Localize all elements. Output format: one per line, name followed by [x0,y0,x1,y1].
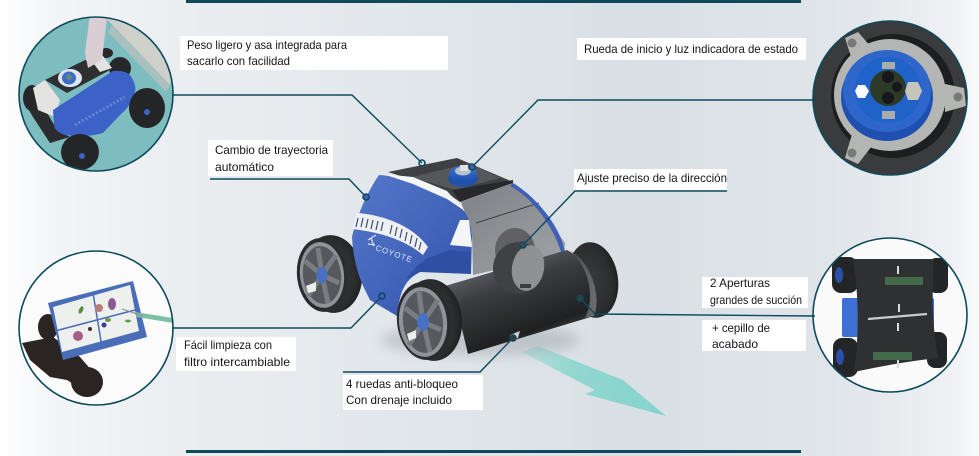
rear right wheel [563,239,623,321]
callout: filter: Fácil limpieza con [184,338,272,352]
leader line: handle [172,95,425,166]
small skid [510,331,520,340]
rear left wheel [293,232,366,316]
callout: steering [574,169,727,190]
leader line: dial [469,100,815,170]
callout: suction: grandes de succión [710,293,802,307]
brush bar [868,314,927,319]
circle: underside detail [813,238,967,392]
white top stripe [383,174,465,211]
callout: wheels [343,375,483,410]
top deck [388,158,513,202]
callout: brush: + cepillo de [712,321,770,335]
callout: trajectory: automático [215,160,274,174]
leader line: trajectory [210,179,369,200]
callout: start dial [577,38,806,60]
callout: wheels: 4 ruedas anti-bloqueo [346,377,458,391]
callout: trajectory [208,140,333,176]
lower shell shade [405,250,471,280]
callout: filter [176,337,296,371]
callout: trajectory: Cambio de trayectoria [215,143,328,157]
wand [135,312,173,323]
blue shell [352,175,472,316]
ring [19,17,173,171]
callout: light weight: Peso ligero y asa integrada para [187,38,347,52]
leader line: steering [520,191,727,248]
blue sides [842,298,858,337]
leader line: suction [577,295,815,316]
robot cleaner [293,158,623,364]
leader line: wheels [343,335,516,372]
circle: filter detail [19,251,173,405]
roller tube [445,250,596,354]
grey housing [461,183,565,275]
dark body [853,259,938,372]
callout: light weight: sacarlo con facilidad [187,54,290,68]
direction knob [488,228,548,299]
mounting plate [834,32,966,164]
callout: light weight [180,36,448,70]
robot body [23,48,165,170]
front wheel [393,276,466,364]
top rule [186,0,801,3]
tube end band [571,251,597,318]
wheels [832,257,948,377]
pool scene [19,10,180,171]
brand mark: COYOTE [374,243,414,264]
ground shadow [380,324,580,356]
hand [85,14,107,68]
callout: filter: filtro intercambiable [184,355,290,369]
suction slots [885,277,923,285]
white vent band [352,213,428,255]
top knob [448,165,478,187]
callout: brush [702,320,806,351]
circle: start dial detail [813,21,967,175]
filter tray [48,281,147,360]
callout: brush: acabado [712,337,758,351]
callout: steering: Ajuste preciso de la dirección [577,171,727,185]
circle: handle detail [19,10,180,171]
marks [898,266,899,368]
bottom rule [186,450,801,453]
leader line: filter [172,293,385,328]
callout: suction [702,276,808,308]
white side accent [450,220,472,247]
water flow arrow [522,346,666,416]
callout: wheels: Con drenaje incluido [346,393,452,407]
callout: start dial: Rueda de inicio y luz indicadora de estado [584,42,798,56]
blue dial [841,50,933,141]
callout: suction: 2 Aperturas [710,276,770,290]
robot underside [22,314,103,397]
